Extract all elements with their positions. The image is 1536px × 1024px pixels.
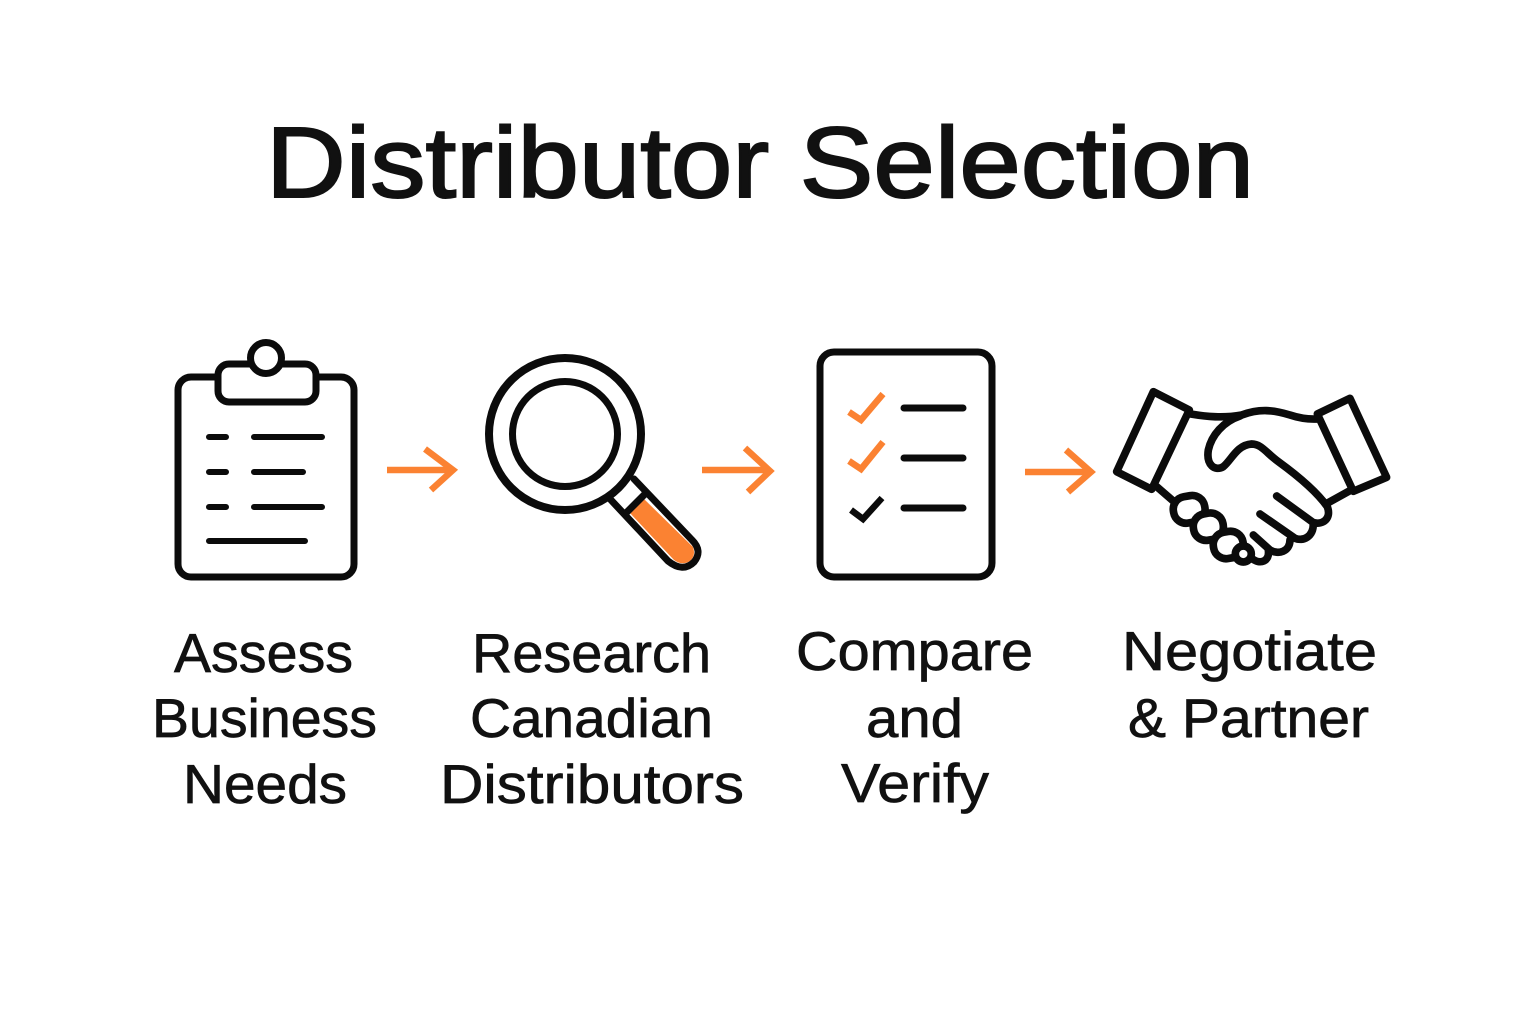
label: Research Canadian Distributors: Research	[472, 622, 711, 684]
label: Negotiate & Partner	[1122, 620, 1377, 749]
arrow: step 1 to 2	[387, 449, 453, 490]
label: Assess Business Needs: Assess	[174, 622, 353, 684]
icon: checklist	[820, 352, 992, 577]
orange checks	[849, 394, 883, 469]
label: Assess Business Needs: Business	[152, 687, 377, 749]
label: Assess Business Needs	[152, 622, 377, 815]
arrow: step 2 to 3	[702, 448, 770, 492]
label: Compare and Verify: Verify	[841, 752, 990, 814]
label: Research Canadian Distributors: Distributors	[440, 753, 744, 815]
handle fill	[629, 498, 694, 563]
label: Compare and Verify: Compare	[796, 620, 1033, 682]
label: Research Canadian Distributors	[440, 622, 744, 815]
label: Negotiate & Partner: & Partner	[1128, 687, 1369, 749]
icon: clipboard	[178, 342, 354, 577]
title: Distributor Selection	[266, 107, 1254, 219]
black check	[851, 498, 882, 519]
label: Compare and Verify: and	[866, 687, 963, 749]
list lines	[904, 408, 963, 508]
arrow: step 3 to 4	[1025, 450, 1091, 492]
label: Assess Business Needs: Needs	[183, 753, 347, 815]
label: Compare and Verify	[796, 620, 1033, 814]
icon: magnifying glass	[489, 358, 698, 567]
label: Negotiate & Partner: Negotiate	[1122, 620, 1377, 682]
icon: handshake	[1117, 392, 1387, 562]
label: Research Canadian Distributors: Canadian	[470, 687, 713, 749]
